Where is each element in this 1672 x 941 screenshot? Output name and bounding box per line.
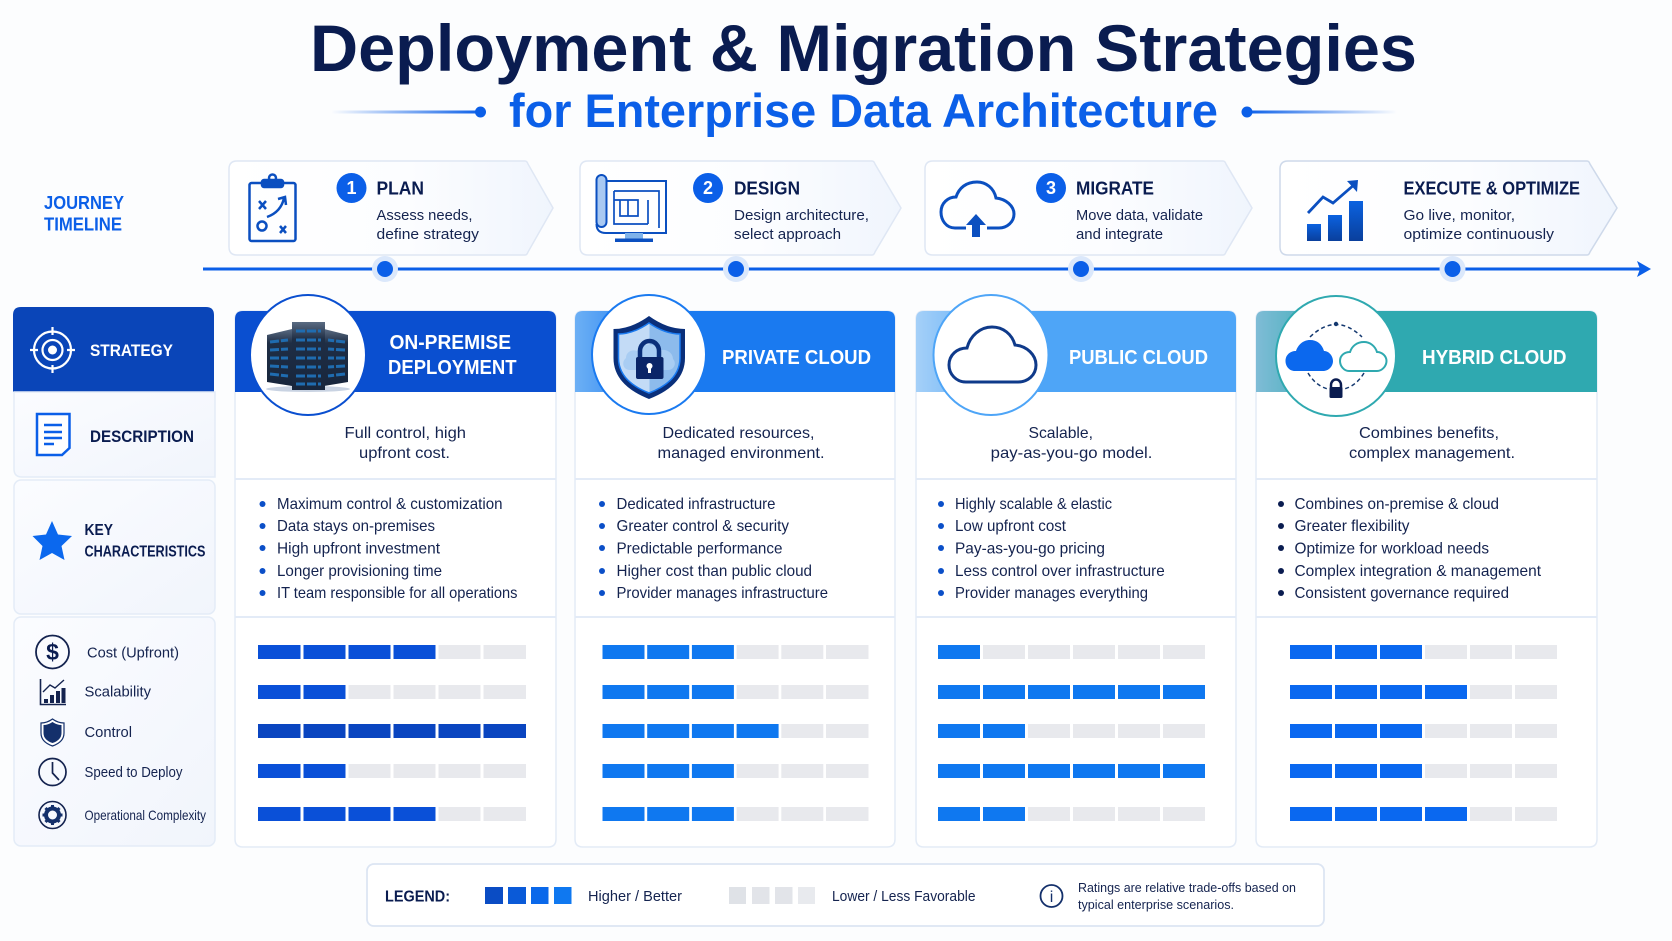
key characteristics list: Greater control & security xyxy=(616,518,789,535)
description text xyxy=(658,425,824,462)
step: plan: define strategy xyxy=(376,226,480,243)
description text: complex management. xyxy=(1349,445,1515,462)
key characteristics list xyxy=(1278,496,1542,602)
key characteristics list: Pay-as-you-go pricing xyxy=(955,540,1105,558)
row label: metrics: Operational Complexity xyxy=(84,807,206,823)
key characteristics list: Highly scalable & elastic xyxy=(955,496,1112,513)
description text: Dedicated resources, xyxy=(662,425,814,442)
key characteristics list: Maximum control & customization xyxy=(277,496,502,513)
description text xyxy=(1349,425,1515,462)
bar chart: on-premise ratings xyxy=(258,645,526,821)
panel: public cloud: PUBLIC CLOUD xyxy=(1069,347,1208,369)
step: design: Design architecture, xyxy=(734,207,869,224)
legend: Lower / Less Favorable xyxy=(832,889,976,905)
key characteristics list: Combines on-premise & cloud xyxy=(1294,496,1499,513)
key characteristics list xyxy=(599,496,828,602)
key characteristics list: IT team responsible for all operations xyxy=(277,585,518,602)
icon: clipboard with play diagram xyxy=(250,174,296,241)
icon: server racks xyxy=(250,295,366,415)
step: plan: Assess needs, xyxy=(376,207,472,224)
key characteristics list: Predictable performance xyxy=(616,540,783,558)
step: plan xyxy=(229,161,553,255)
icon: dollar: $ xyxy=(46,639,59,665)
icon: cloud outline xyxy=(934,295,1048,415)
row label: strategy xyxy=(13,307,214,392)
row label: metrics: Scalability xyxy=(84,684,151,700)
key characteristics list: Greater flexibility xyxy=(1294,518,1410,535)
row label: metrics: Speed to Deploy xyxy=(84,764,183,781)
legend note: Ratings are relative trade-offs based on xyxy=(1078,880,1296,895)
row label: key characteristics xyxy=(14,480,215,614)
row label: key characteristics: CHARACTERISTICS xyxy=(84,544,206,560)
step: execute and optimize: EXECUTE & OPTIMIZE xyxy=(1404,178,1580,198)
bar chart: hybrid cloud ratings xyxy=(1290,645,1557,821)
icon: dollar xyxy=(36,636,69,668)
panel: hybrid cloud: HYBRID CLOUD xyxy=(1422,347,1566,369)
key characteristics list: Consistent governance required xyxy=(1294,585,1509,602)
journey timeline label: JOURNEY xyxy=(44,193,124,213)
panel: row labels xyxy=(13,307,215,846)
step: execute and optimize xyxy=(1280,161,1617,255)
description text: Scalable, xyxy=(1028,425,1093,442)
key characteristics list: Provider manages infrastructure xyxy=(616,585,828,602)
step: design xyxy=(580,161,901,255)
description text: Combines benefits, xyxy=(1359,425,1499,442)
subtitle xyxy=(331,84,1397,137)
icon: gear xyxy=(39,802,66,828)
legend: Higher / Better xyxy=(588,889,682,905)
panel: on-premise deployment xyxy=(235,295,556,847)
key characteristics list: Data stays on-premises xyxy=(277,518,435,535)
key characteristics list: Low upfront cost xyxy=(955,518,1067,535)
icon: blueprint on monitor xyxy=(596,175,666,242)
panel: on-premise deployment: DEPLOYMENT xyxy=(388,357,516,379)
row label: metrics xyxy=(14,617,215,846)
icon: scalability chart xyxy=(40,679,66,704)
panel: hybrid cloud xyxy=(1256,296,1597,847)
step: plan: 1 xyxy=(346,178,357,198)
step: migrate: MIGRATE xyxy=(1076,178,1154,198)
row label: description xyxy=(14,392,215,477)
journey timeline label xyxy=(44,193,124,234)
step: migrate: Move data, validate xyxy=(1076,207,1203,224)
icon: info xyxy=(1040,885,1062,907)
description text: managed environment. xyxy=(658,445,824,462)
icon: hybrid clouds with lock xyxy=(1276,296,1396,416)
legend note: typical enterprise scenarios. xyxy=(1078,897,1234,912)
icon: cloud upload xyxy=(941,182,1014,237)
legend: lower swatches xyxy=(729,887,815,904)
legend: LEGEND: xyxy=(385,888,450,906)
description text xyxy=(991,425,1152,462)
step: design: DESIGN xyxy=(734,178,800,198)
row label: metrics: Control xyxy=(84,724,132,741)
legend: higher swatches xyxy=(485,887,572,904)
step: migrate: and integrate xyxy=(1076,226,1163,243)
icon: shield xyxy=(41,719,64,746)
key characteristics list xyxy=(938,496,1165,602)
key characteristics list: Dedicated infrastructure xyxy=(616,496,776,513)
icon: info: i xyxy=(1050,889,1053,906)
key characteristics list: Optimize for workload needs xyxy=(1294,540,1489,558)
timeline arrow with milestones xyxy=(203,256,1651,282)
journey timeline label: TIMELINE xyxy=(44,214,122,234)
key characteristics list: High upfront investment xyxy=(277,540,441,558)
step: migrate: 3 xyxy=(1046,178,1056,198)
key characteristics list: Longer provisioning time xyxy=(277,563,442,580)
step: design: 2 xyxy=(703,178,713,198)
key characteristics list: Provider manages everything xyxy=(955,585,1148,602)
description text: Full control, high xyxy=(344,425,466,442)
key characteristics list: Less control over infrastructure xyxy=(955,563,1165,580)
bar chart: private cloud ratings xyxy=(602,645,868,821)
description text: pay-as-you-go model. xyxy=(991,445,1152,462)
step: execute and optimize: Go live, monitor, xyxy=(1404,207,1515,224)
icon: shield with lock xyxy=(592,295,706,414)
panel: private cloud xyxy=(575,295,895,847)
legend note xyxy=(1078,880,1296,912)
title: Deployment & Migration Strategies xyxy=(310,11,1417,85)
key characteristics list: Complex integration & management xyxy=(1294,563,1542,580)
icon: clock xyxy=(39,758,66,786)
step: execute and optimize: optimize continuously xyxy=(1404,226,1555,243)
description text: upfront cost. xyxy=(359,445,450,462)
icon: growth chart xyxy=(1307,180,1363,241)
panel: public cloud xyxy=(916,295,1236,847)
subtitle: for Enterprise Data Architecture xyxy=(509,84,1218,137)
key characteristics list xyxy=(260,496,518,602)
description text xyxy=(344,425,466,462)
step: migrate xyxy=(925,161,1252,255)
step: design: select approach xyxy=(734,226,841,243)
key characteristics list: Higher cost than public cloud xyxy=(616,563,812,580)
panel: private cloud: PRIVATE CLOUD xyxy=(722,347,871,369)
row label: key characteristics: KEY xyxy=(84,522,113,539)
row label: strategy: STRATEGY xyxy=(90,341,174,360)
row label: metrics: Cost (Upfront) xyxy=(87,644,179,662)
legend xyxy=(367,864,1324,926)
step: plan: PLAN xyxy=(376,178,424,198)
bar chart: public cloud ratings xyxy=(938,645,1205,821)
row label: description: DESCRIPTION xyxy=(90,427,194,446)
panel: on-premise deployment: ON-PREMISE xyxy=(390,332,511,354)
